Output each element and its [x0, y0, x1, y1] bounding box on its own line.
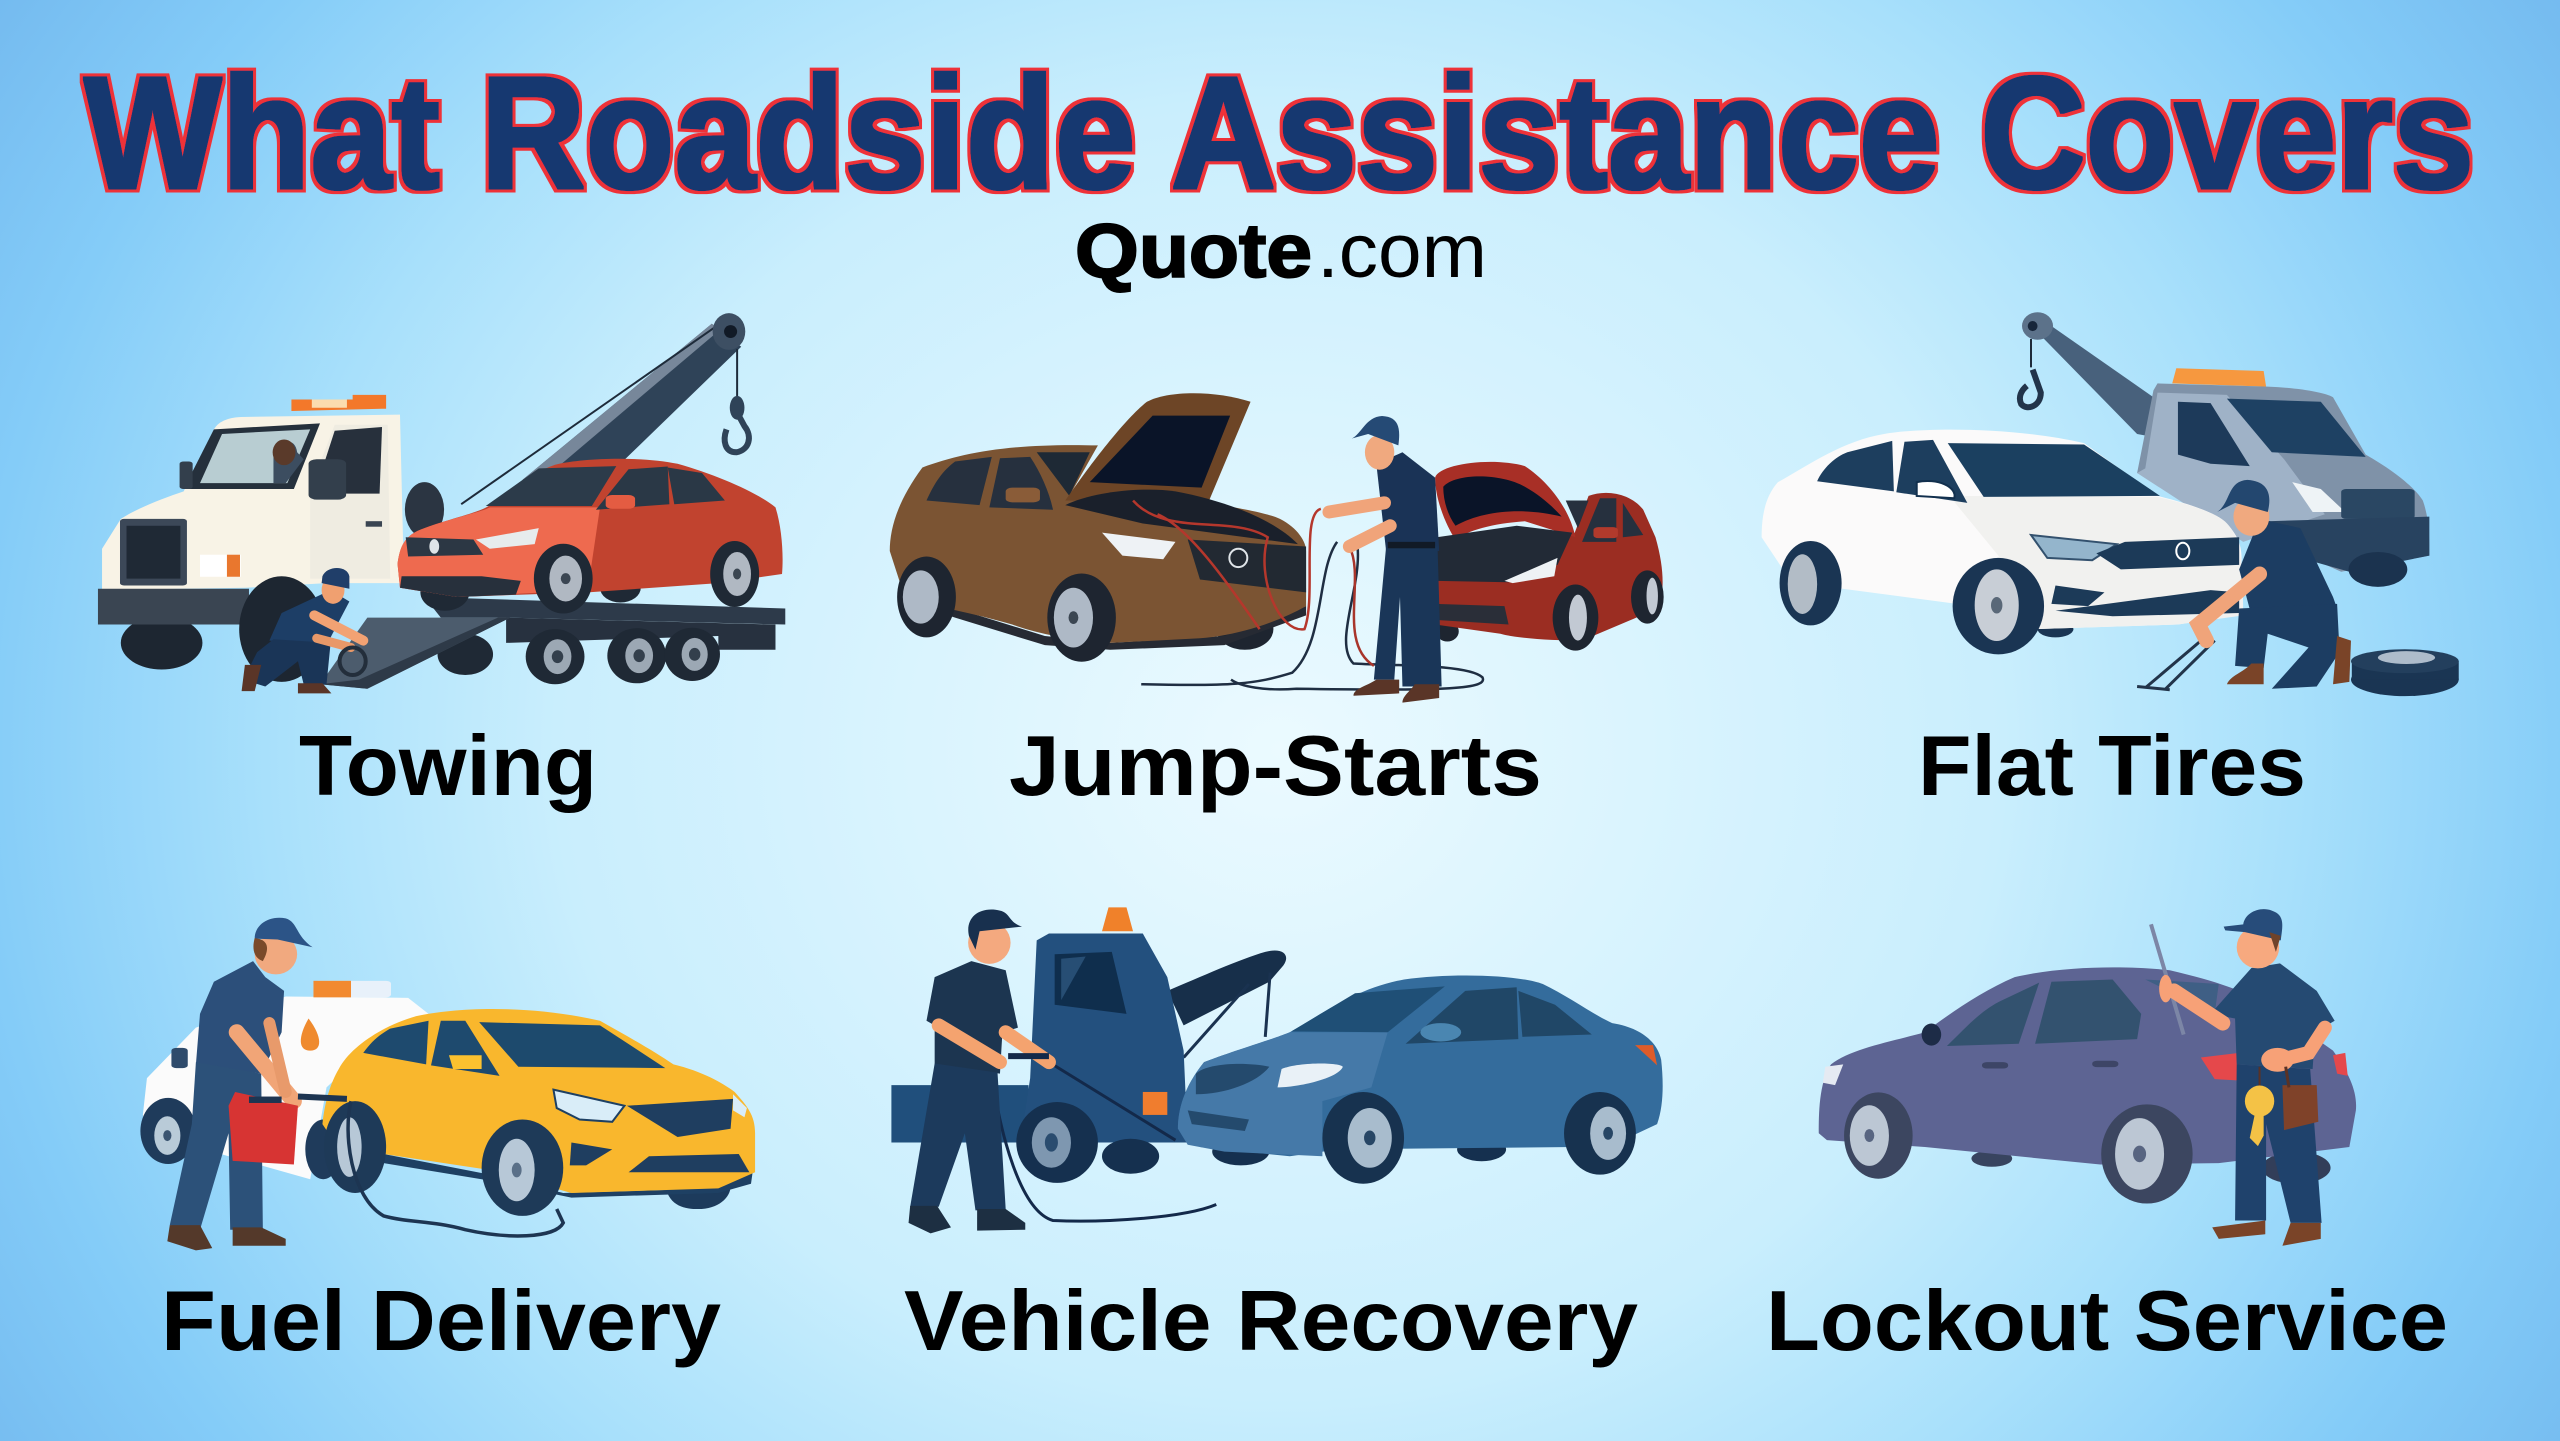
flatbed truck bed and wheels: [320, 597, 785, 689]
white fuel truck: [140, 981, 429, 1179]
panel: flat tires illustration: [1762, 312, 2459, 696]
mechanic: [1329, 416, 1442, 703]
logo: Quote.com: Quote: [1075, 209, 1312, 294]
logo: Quote.com: .com: [1317, 209, 1487, 294]
blue sedan: [1178, 975, 1663, 1184]
label: Jump-Starts: Jump-Starts: [1009, 719, 1542, 814]
recovery cable: [992, 1062, 1216, 1221]
logo: Quote.com: [1075, 209, 1487, 294]
brown SUV with open hood: [890, 393, 1306, 662]
cab: [98, 395, 444, 682]
group: red car, mechanic and jumper cables: [1133, 416, 1664, 703]
panel: lockout service illustration: [1819, 909, 2356, 1246]
tow truck behind: [2020, 312, 2429, 587]
label: Vehicle Recovery: Vehicle Recovery: [904, 1274, 1638, 1369]
red car with open hood: [1435, 462, 1664, 651]
jumper cables: [1133, 501, 1483, 690]
label: Towing: Towing: [299, 719, 597, 814]
white car: [1762, 430, 2243, 654]
mechanic with red fuel can: [167, 918, 347, 1250]
panel: jump-starts illustration: [890, 393, 1306, 662]
purple car: [1819, 967, 2356, 1204]
recovery tow truck: [891, 907, 1286, 1183]
crane boom and hook: [461, 313, 749, 504]
fuel hose: [348, 1101, 563, 1236]
mechanic kneeling with jack: [2137, 480, 2351, 690]
yellow car: [322, 1009, 755, 1216]
mechanic operating winch: [909, 910, 1049, 1233]
mechanic crouching: [242, 568, 366, 693]
label: Fuel Delivery: Fuel Delivery: [161, 1274, 721, 1369]
panel: vehicle recovery illustration: [891, 907, 1663, 1233]
spare tire: [2351, 649, 2459, 696]
panel: fuel delivery illustration: [140, 918, 755, 1250]
label: Lockout Service: Lockout Service: [1766, 1274, 2448, 1369]
panel: towing illustration: [98, 313, 785, 693]
label: Flat Tires: Flat Tires: [1918, 719, 2306, 814]
mechanic with key and slim jim: [2151, 909, 2335, 1246]
red car: [398, 459, 783, 613]
